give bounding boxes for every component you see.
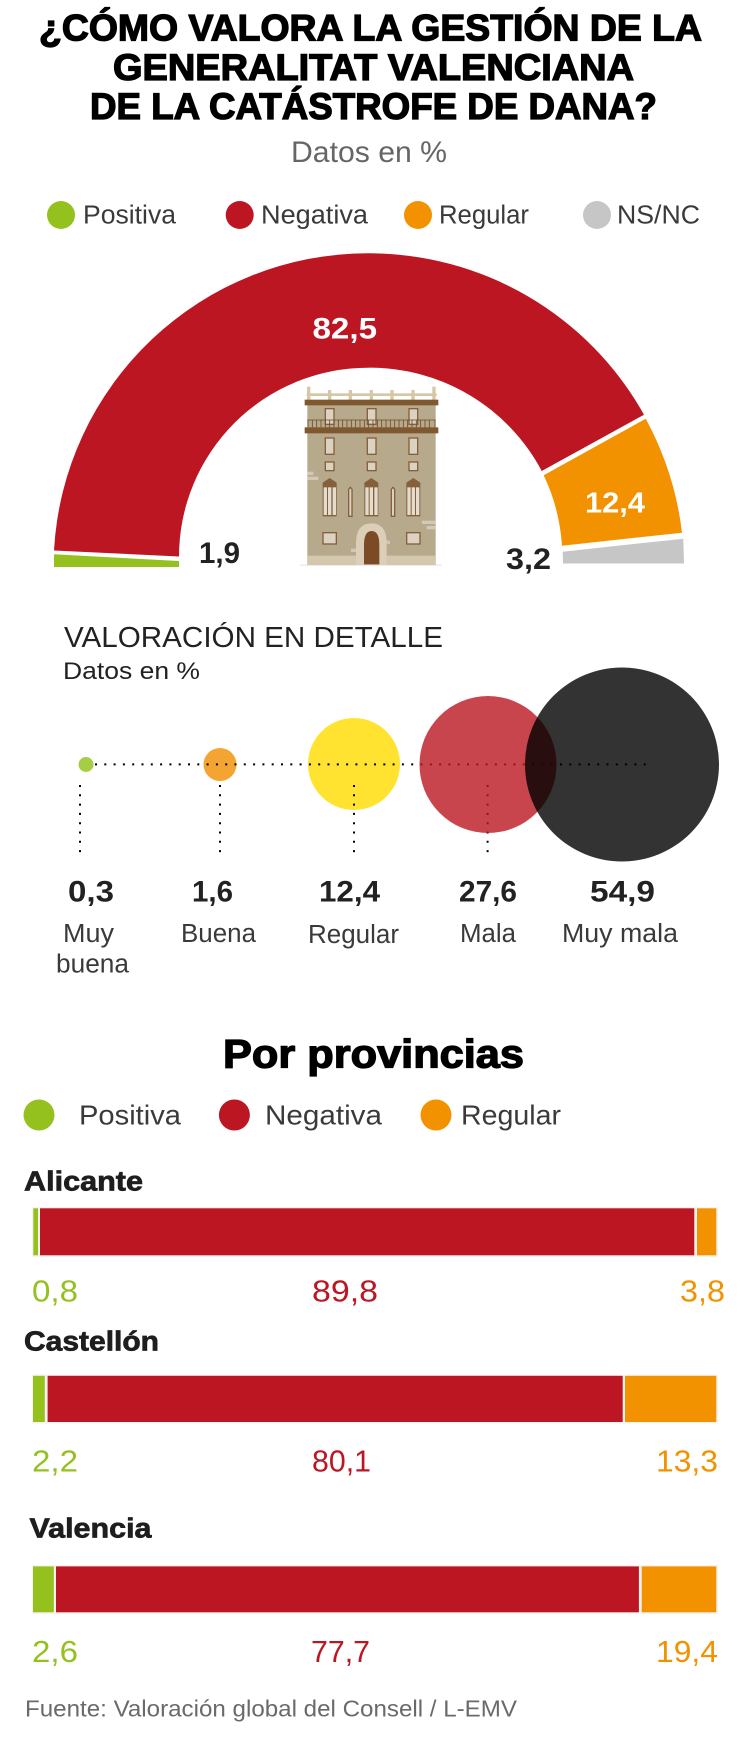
legend: overall valuation: Regular [439,201,529,229]
values: Alicante: 3,8 [680,1274,725,1308]
title: ¿CÓMO VALORA LA GESTIÓN DE LA [39,7,702,49]
values: Castellón: 80,1 [312,1443,371,1478]
bubble: buena [204,748,236,781]
segment: negativa 82,5 [54,253,644,556]
segment: regular 12,4 [544,419,682,546]
bubble: regular [308,718,400,810]
segment: positiva 1,9 [54,554,179,567]
value: 3,2: 3,2 [506,543,551,576]
title: GENERALITAT VALENCIANA [113,47,634,88]
value: 1,9: 1,9 [199,537,240,570]
label: Alicante: Alicante [24,1166,143,1197]
value: 82,5: 82,5 [312,312,377,345]
stacked bar: Castellón [32,1374,718,1424]
values and labels: Regular [308,921,400,949]
values: Valencia [32,1634,718,1669]
values and labels: 54,9 [590,876,655,909]
title: DE LA CATÁSTROFE DE DANA? [90,86,657,127]
values and labels [56,876,679,979]
values and labels: 1,6 [192,876,233,909]
legend: overall valuation: Negativa [261,201,369,229]
legend: provinces: Regular [461,1100,561,1131]
legend: overall valuation [47,201,700,229]
values and labels: 27,6 [459,876,517,909]
panel: Castellón [24,1326,718,1478]
bubble: mala [420,696,556,833]
connector: horizontal dots [95,763,646,765]
label: Castellón: Castellón [24,1326,159,1357]
value: 12,4: 12,4 [585,488,645,520]
values and labels: 0,3 [68,876,114,909]
connectors: vertical dots [80,785,488,853]
values: Castellón: 13,3 [656,1443,718,1478]
values and labels: buena [56,951,130,979]
panel: Alicante [24,1166,725,1308]
heading: valoración en detalle: VALORACIÓN EN DETALLE [64,621,443,654]
values: Valencia: 2,6 [32,1634,78,1669]
panel: Valencia [30,1512,718,1669]
values: Castellón [32,1443,718,1478]
values and labels: Muy mala [562,920,679,948]
legend: overall valuation: Positiva [83,201,177,229]
legend: provinces: Negativa [265,1100,382,1131]
bubble: muy buena [78,757,94,772]
legend: provinces: Positiva [79,1100,181,1131]
stacked bar: Alicante [32,1207,718,1257]
legend: overall valuation: NS/NC [617,201,700,229]
bubble: muy mala [525,668,719,862]
bubble chart [78,668,719,862]
icon: Palau de la Generalitat building [300,387,442,566]
values: Castellón: 2,2 [32,1443,78,1478]
values and labels: Muy [63,920,114,948]
heading: por provincias: Por provincias [223,1032,524,1076]
values: Alicante: 89,8 [312,1274,378,1308]
subtitle: datos en %: Datos en % [291,136,447,169]
label: Valencia: Valencia [30,1512,152,1543]
values: Alicante: 0,8 [32,1274,78,1308]
values and labels: 12,4 [319,876,381,909]
legend: provinces [24,1100,561,1131]
semicircle chart [54,253,684,576]
values: Valencia: 19,4 [656,1634,718,1669]
source note: Fuente: Valoración global del Consell / L-EMV [25,1696,518,1722]
stacked bar: Valencia [32,1565,718,1614]
segment: ns/nc 3,2 [563,539,684,564]
values: Valencia: 77,7 [311,1634,370,1669]
title [39,7,702,127]
values and labels: Mala [460,920,517,948]
values: Alicante [32,1274,725,1308]
subheading: datos en %: Datos en % [63,658,200,685]
values and labels: Buena [181,920,257,948]
